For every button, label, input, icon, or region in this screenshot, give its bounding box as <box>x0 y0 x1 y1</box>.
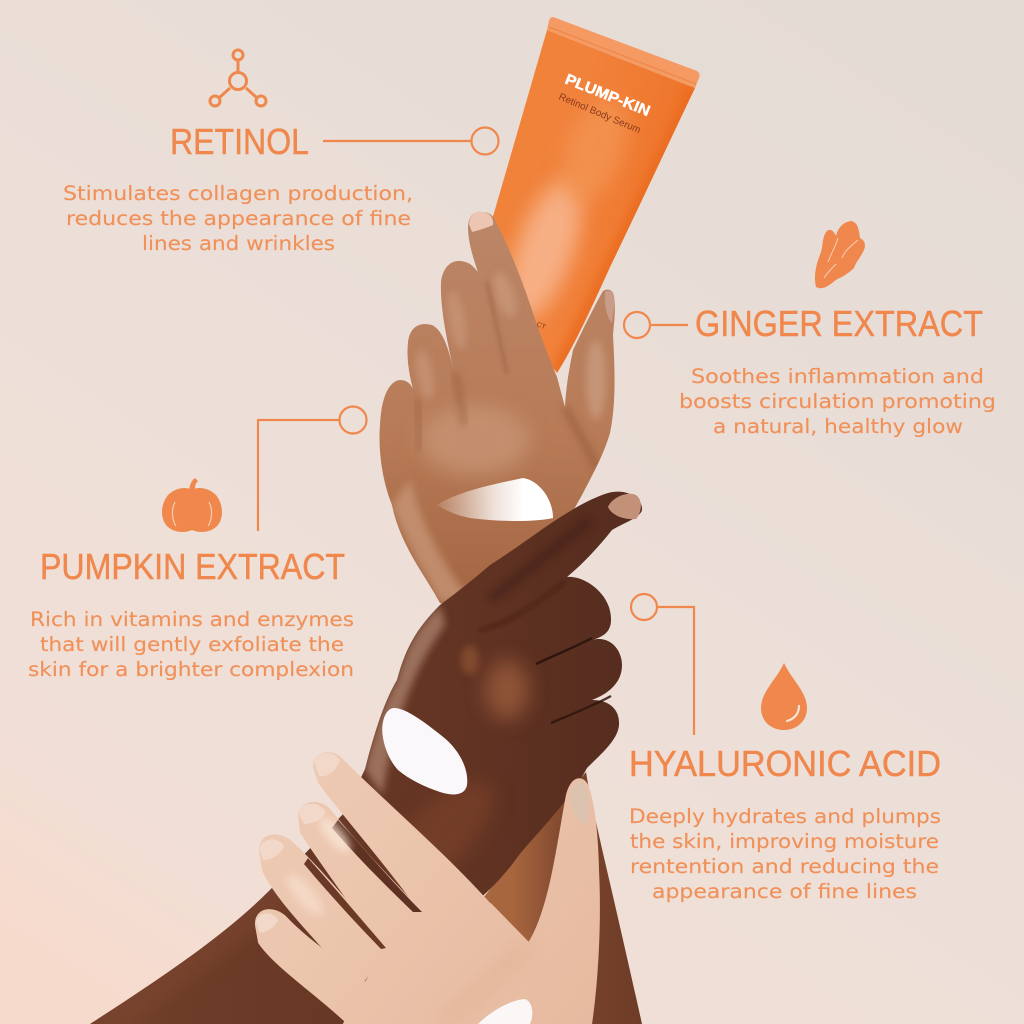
product tube: CT <box>535 321 547 332</box>
top hand, medium skin <box>380 212 615 610</box>
icon: molecule <box>210 50 266 106</box>
heading: hyaluronic acid: HYALURONIC ACID <box>629 743 941 784</box>
text: hyaluronic acid description <box>629 805 941 903</box>
text: hyaluronic acid description: appearance of fine lines <box>652 880 917 903</box>
heading: ginger extract: GINGER EXTRACT <box>695 303 983 344</box>
text: hyaluronic acid description: Deeply hydrates and plumps <box>629 805 941 828</box>
text: ginger description: Soothes inflammation and <box>691 365 984 388</box>
nail: dark index finger <box>608 494 641 519</box>
dark hand shading <box>100 520 590 1024</box>
connector: ginger <box>624 312 688 338</box>
lower arm behind hands <box>300 772 642 1024</box>
heading: pumpkin extract: PUMPKIN EXTRACT <box>40 546 345 587</box>
cream dollop on dark hand <box>382 708 467 794</box>
nail: index finger <box>469 212 493 232</box>
cream smear on top hand <box>437 478 553 521</box>
thumb nail <box>570 783 589 825</box>
dark hand and forearm <box>90 492 642 1024</box>
little finger <box>257 911 372 1024</box>
finger crease <box>487 282 507 374</box>
cream at bottom <box>478 999 532 1024</box>
middle finger <box>300 804 422 952</box>
gap between index and middle fingers <box>332 820 422 912</box>
ginger callout <box>624 221 996 438</box>
pumpkin callout <box>28 406 366 681</box>
text: ginger description: a natural, healthy glow <box>713 415 963 438</box>
text: retinol description <box>63 182 413 255</box>
gap between middle and ring fingers <box>304 858 386 949</box>
light hand <box>256 753 598 1024</box>
product tube: Retinol Body Serum <box>557 92 642 136</box>
top hand shading <box>392 269 606 603</box>
text: pumpkin description: that will gently exfoliate the <box>40 633 344 656</box>
connector: hyaluronic acid <box>631 594 694 735</box>
product tube <box>476 17 700 373</box>
dark finger creases <box>479 582 565 630</box>
nails <box>256 753 340 933</box>
text: retinol description: reduces the appearance of fine <box>66 207 411 230</box>
product tube: PLUMP-KIN <box>563 71 652 120</box>
icon: ginger <box>815 221 865 288</box>
ring finger <box>261 836 386 987</box>
retinol callout <box>63 50 498 255</box>
index finger <box>315 754 492 916</box>
text: hyaluronic acid description: rentention and reducing the <box>630 855 939 878</box>
text: pumpkin description <box>28 608 354 681</box>
nail: thumb <box>605 291 614 323</box>
text: pumpkin description: Rich in vitamins and enzymes <box>30 608 354 631</box>
text: pumpkin description: skin for a brighter complexion <box>28 658 354 681</box>
icon: pumpkin <box>162 478 222 532</box>
icon: water drop <box>761 663 807 730</box>
text: retinol description: lines and wrinkles <box>142 232 335 255</box>
finger highlights <box>281 813 529 1024</box>
heading: retinol: RETINOL <box>170 121 309 162</box>
connector: retinol <box>323 128 498 154</box>
text: ginger description <box>679 365 996 438</box>
hyaluronic acid callout <box>629 594 941 903</box>
text: hyaluronic acid description: the skin, improving moisture <box>630 830 939 853</box>
text: ginger description: boosts circulation promoting <box>679 390 996 413</box>
connector: pumpkin <box>258 406 366 531</box>
text: retinol description: Stimulates collagen production, <box>63 182 413 205</box>
